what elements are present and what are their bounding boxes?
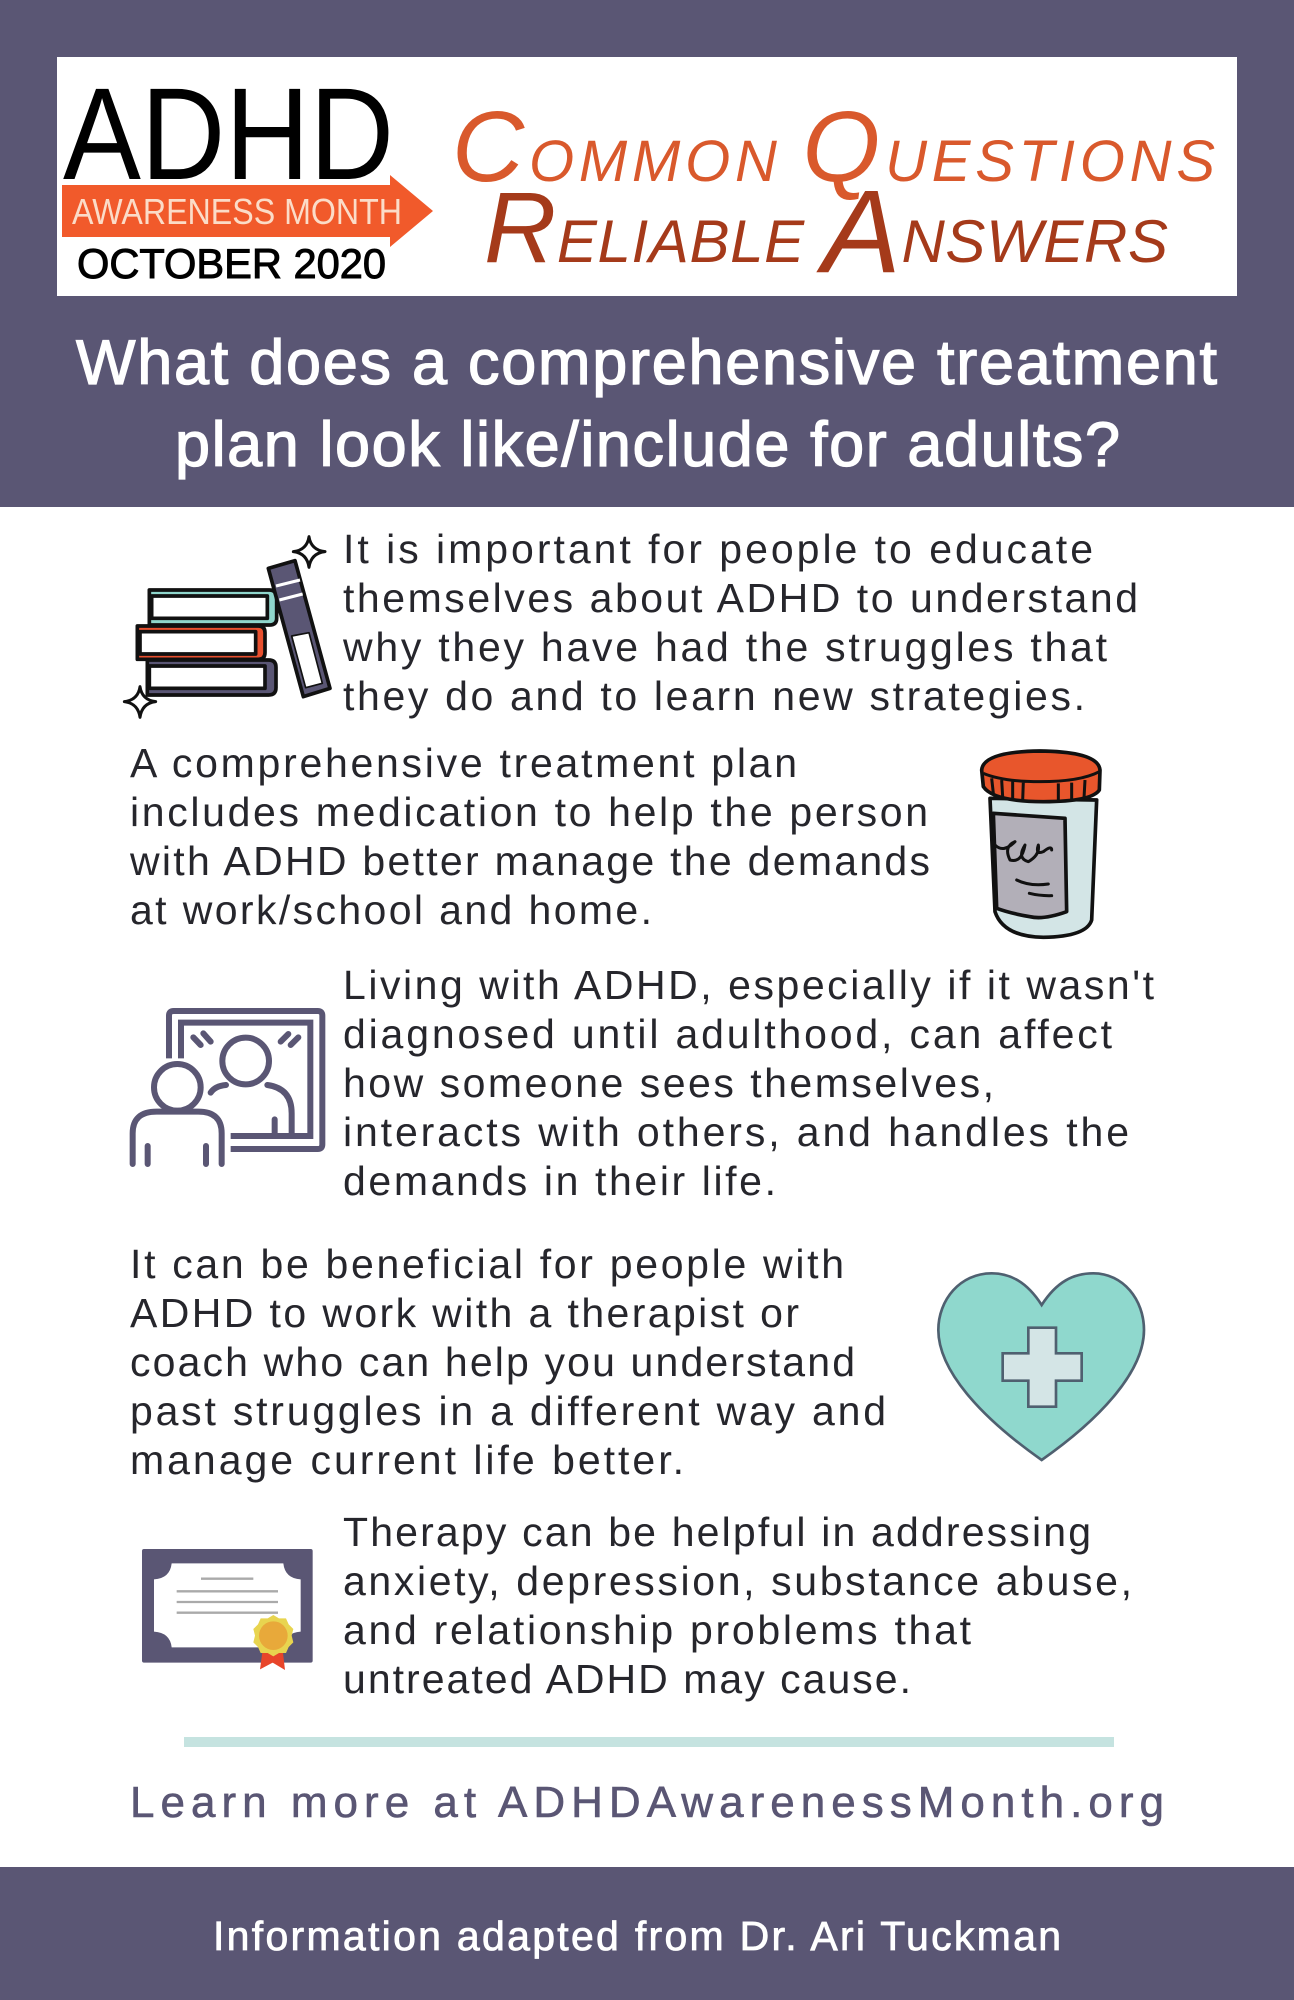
icon: books xyxy=(124,537,330,717)
text block: medication xyxy=(129,740,930,933)
header band xyxy=(0,0,1294,507)
text block: educate: why they have had the struggles that xyxy=(342,624,1108,670)
text block: therapy: untreated ADHD may cause. xyxy=(343,1656,911,1702)
label scribble xyxy=(995,842,1052,896)
text block: therapist: coach who can help you understand xyxy=(130,1339,855,1385)
navy book xyxy=(147,660,276,695)
website link: Learn more at ADHDAwarenessMonth.org xyxy=(130,1778,1164,1827)
footer credit: Information adapted from Dr. Ari Tuckman xyxy=(213,1913,1061,1959)
text block: living with ADHD xyxy=(343,962,1155,1204)
text block: living with ADHD: Living with ADHD, especially if it wasn't xyxy=(343,962,1155,1008)
mirror frame xyxy=(169,1011,322,1149)
october 2020: OCTOBER 2020 xyxy=(77,240,386,287)
ribbon xyxy=(260,1650,285,1670)
text block: educate: themselves about ADHD to understand xyxy=(343,575,1138,621)
red book xyxy=(137,626,265,659)
person xyxy=(133,1064,222,1164)
text block: therapist xyxy=(130,1241,886,1483)
title xyxy=(76,328,1217,480)
text block: therapist: manage current life better. xyxy=(130,1437,684,1483)
text block: medication: includes medication to help the person xyxy=(130,789,928,835)
icon: medicine jar xyxy=(982,751,1100,937)
seal xyxy=(253,1615,293,1656)
jar label xyxy=(993,813,1067,918)
text block: educate: It is important for people to educate xyxy=(343,526,1093,572)
jar body xyxy=(990,798,1097,937)
text block: therapist: ADHD to work with a therapist or xyxy=(130,1290,799,1336)
text block: medication: A comprehensive treatment plan xyxy=(130,740,797,786)
icon: person at mirror xyxy=(133,1011,322,1164)
teal book xyxy=(149,590,277,625)
ADHD wordmark: ADHD xyxy=(63,60,394,207)
text block: therapist: It can be beneficial for people with xyxy=(130,1241,844,1287)
text block: educate: they do and to learn new strategies. xyxy=(343,673,1085,719)
text block: living with ADHD: interacts with others, and handles the xyxy=(343,1109,1129,1155)
footer band xyxy=(0,1867,1294,2000)
common questions heading: COMMON QUESTIONS xyxy=(452,91,1215,203)
title: plan look like/include for adults? xyxy=(175,410,1120,480)
text block: medication: at work/school and home. xyxy=(130,887,652,933)
lid xyxy=(982,751,1100,802)
text block: therapy: anxiety, depression, substance abuse, xyxy=(343,1558,1132,1604)
text block: therapist: past struggles in a different way and xyxy=(130,1388,886,1434)
text block: living with ADHD: how someone sees themselves, xyxy=(343,1060,994,1106)
text block: therapy xyxy=(343,1509,1132,1702)
orange arrow xyxy=(62,175,433,247)
awareness month label: AWARENESS MONTH xyxy=(72,191,402,232)
reliable answers heading: NSWERS xyxy=(901,208,1168,275)
logo panel xyxy=(57,57,1237,298)
leaning book xyxy=(268,561,330,697)
text block: therapy: Therapy can be helpful in addressing xyxy=(343,1509,1091,1555)
sparkles xyxy=(124,537,325,717)
text block: living with ADHD: demands in their life. xyxy=(343,1158,776,1204)
reliable answers heading: RELIABLE xyxy=(484,172,804,284)
text block: educate xyxy=(342,526,1138,719)
reflection xyxy=(193,1033,298,1133)
icon: certificate xyxy=(142,1549,313,1670)
icon: heart with cross xyxy=(938,1273,1144,1460)
reliable answers heading: A xyxy=(816,166,901,298)
text block: therapy: and relationship problems that xyxy=(343,1607,972,1653)
text block: living with ADHD: diagnosed until adulthood, can affect xyxy=(343,1011,1113,1057)
title: What does a comprehensive treatment xyxy=(76,328,1217,398)
text block: medication: with ADHD better manage the demands xyxy=(129,838,930,884)
